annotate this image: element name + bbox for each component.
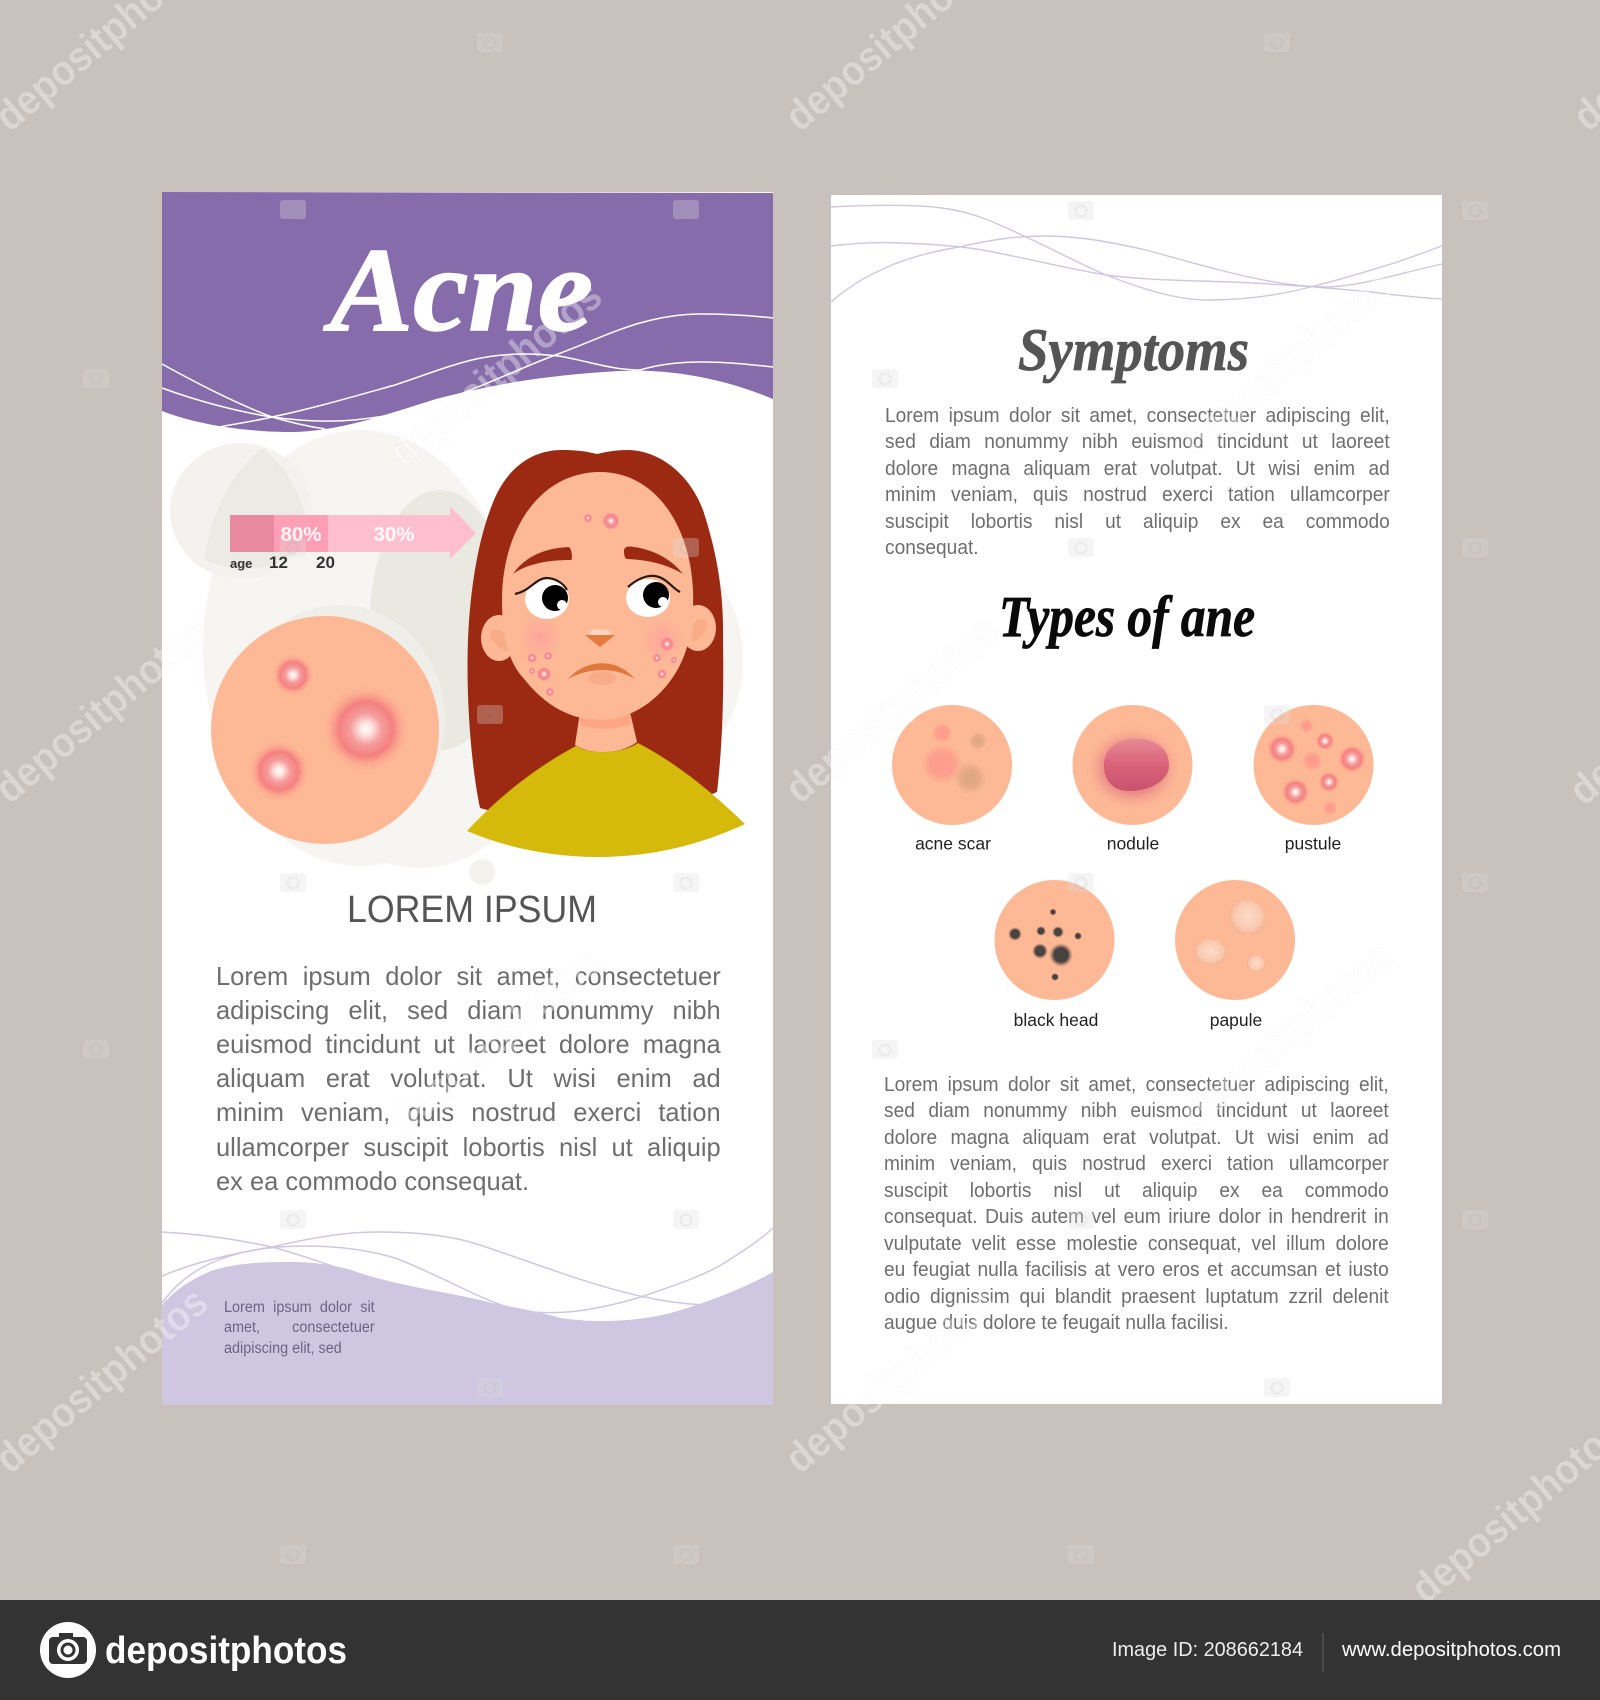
website: www.depositphotos.com: [1341, 1639, 1561, 1661]
text block: right lower body: vulputate velit esse molestie consequat, vel illum dolore: [884, 1232, 1389, 1254]
neck: [575, 712, 637, 752]
text block: right lower body: suscipit lobortis nisl ut aliquip ex ea commodo: [884, 1178, 1389, 1202]
label: black head: [1014, 1010, 1098, 1030]
illustration: girl with acne: [467, 450, 745, 857]
age axis: 20: [316, 553, 335, 572]
text block: right lower body: eu feugiat nulla facilisis at vero eros et accumsan et iusto: [884, 1258, 1389, 1281]
icon: acne scar: [892, 705, 1012, 854]
age axis: [230, 553, 335, 572]
background blobs: [170, 430, 743, 885]
text block: symptoms body: [885, 404, 1390, 559]
watermark layer: depositphotos: [380, 937, 610, 1142]
age axis: 12: [269, 553, 288, 572]
title: Acne: [323, 223, 593, 356]
text block: symptoms body: minim veniam, quis nostrud exerci tation ullamcorper: [885, 483, 1390, 506]
percent labels: 30%: [373, 523, 415, 546]
banner wave lines: [162, 314, 773, 429]
label: pustule: [1285, 834, 1341, 854]
nose: [585, 629, 615, 647]
top purple banner: [162, 192, 773, 432]
label: acne scar: [915, 834, 991, 854]
text block: left body: ex ea commodo consequat.: [216, 1166, 529, 1196]
text block: right lower body: dolore magna aliquam erat volutpat. Ut wisi enim ad: [884, 1126, 1389, 1148]
icon: depositphotos logo: [40, 1622, 96, 1678]
text block: left body: euismod tincidunt ut laoreet dolore magna: [216, 1029, 721, 1059]
panel: right brochure page: [831, 195, 1442, 1404]
bottom lilac wave: [162, 1262, 773, 1405]
text block: left footer note: [224, 1298, 374, 1357]
text block: symptoms body: dolore magna aliquam erat volutpat. Ut wisi enim ad: [885, 457, 1390, 480]
text block: left footer note: Lorem ipsum dolor sit: [224, 1298, 374, 1316]
text block: right lower body: augue duis dolore te feugait nulla facilisi.: [884, 1311, 1229, 1334]
heading: types of acne: Types of ane: [999, 584, 1255, 649]
image id: Image ID: 208662184: [1112, 1639, 1303, 1661]
text block: left body: Lorem ipsum dolor sit amet, consectetuer: [216, 961, 721, 991]
text block: left body: aliquam erat volutpat. Ut wisi enim ad: [216, 1063, 721, 1093]
icon: pustule: [1254, 705, 1374, 854]
heading: lorem ipsum: LOREM IPSUM: [347, 889, 597, 931]
panel: left brochure page: [162, 192, 773, 1405]
text block: left body: [216, 961, 721, 1196]
label: papule: [1210, 1010, 1262, 1030]
watermark layer: depositphotos: [1172, 259, 1402, 464]
watermark layer: depositphotos: [380, 271, 610, 476]
text block: symptoms body: sed diam nonummy nibh euismod tincidunt ut laoreet: [885, 430, 1390, 453]
blush: [518, 615, 684, 662]
label: nodule: [1107, 834, 1159, 854]
eyes: [515, 576, 680, 619]
text block: left footer note: adipiscing elit, sed: [224, 1340, 341, 1357]
text block: symptoms body: suscipit lobortis nisl ut aliquip ex ea commodo: [885, 510, 1390, 533]
sweater: [467, 743, 745, 857]
text block: left body: minim veniam, quis nostrud exerci tation: [216, 1097, 721, 1127]
icon: nodule: [1072, 705, 1192, 854]
top wave lines: [831, 205, 1442, 302]
percent labels: 80%: [280, 523, 322, 546]
watermark layer: depositphotos: [776, 1277, 1006, 1482]
text block: left footer note: amet, consectetuer: [224, 1319, 374, 1336]
logo wordmark: depositphotos: [105, 1630, 347, 1672]
text block: symptoms body: consequat.: [885, 536, 979, 559]
hair: [468, 450, 723, 840]
watermark layer: depositphotos: [776, 607, 1006, 812]
mouth and chin: [568, 663, 635, 685]
text block: right lower body: consequat. Duis autem vel eum iriure dolor in hendrerit in: [884, 1205, 1389, 1228]
text block: left body: adipiscing elit, sed diam nonummy nibh: [216, 995, 721, 1025]
text block: right lower body: Lorem ipsum dolor sit amet, consectetuer adipiscing elit,: [884, 1072, 1389, 1096]
text block: right lower body: [884, 1072, 1389, 1334]
ears: [481, 605, 716, 661]
icon: black head: [994, 880, 1114, 1030]
eyebrows: [513, 546, 683, 574]
watermark layer: depositphotos: [1172, 931, 1402, 1136]
facial pimples: [528, 513, 677, 696]
illustration: magnified skin with pimples: [211, 616, 439, 844]
text block: left body: ullamcorper suscipit lobortis nisl ut aliquip: [216, 1132, 721, 1162]
text block: right lower body: odio dignissim qui blandit praesent luptatum zzril delenit: [884, 1284, 1389, 1308]
text block: right lower body: minim veniam, quis nostrud exerci tation ullamcorper: [884, 1152, 1389, 1175]
arrow: age percentage chart: [230, 506, 476, 572]
age axis: age: [230, 556, 252, 571]
bottom wave lines: [162, 1228, 773, 1318]
percent labels: [280, 523, 415, 546]
text block: right lower body: sed diam nonummy nibh euismod tincidunt ut laoreet: [884, 1099, 1389, 1122]
face: [502, 472, 693, 720]
text block: symptoms body: Lorem ipsum dolor sit amet, consectetuer adipiscing elit,: [885, 404, 1390, 427]
icon: papule: [1175, 880, 1295, 1030]
heading: symptoms: Symptoms: [1018, 317, 1249, 383]
